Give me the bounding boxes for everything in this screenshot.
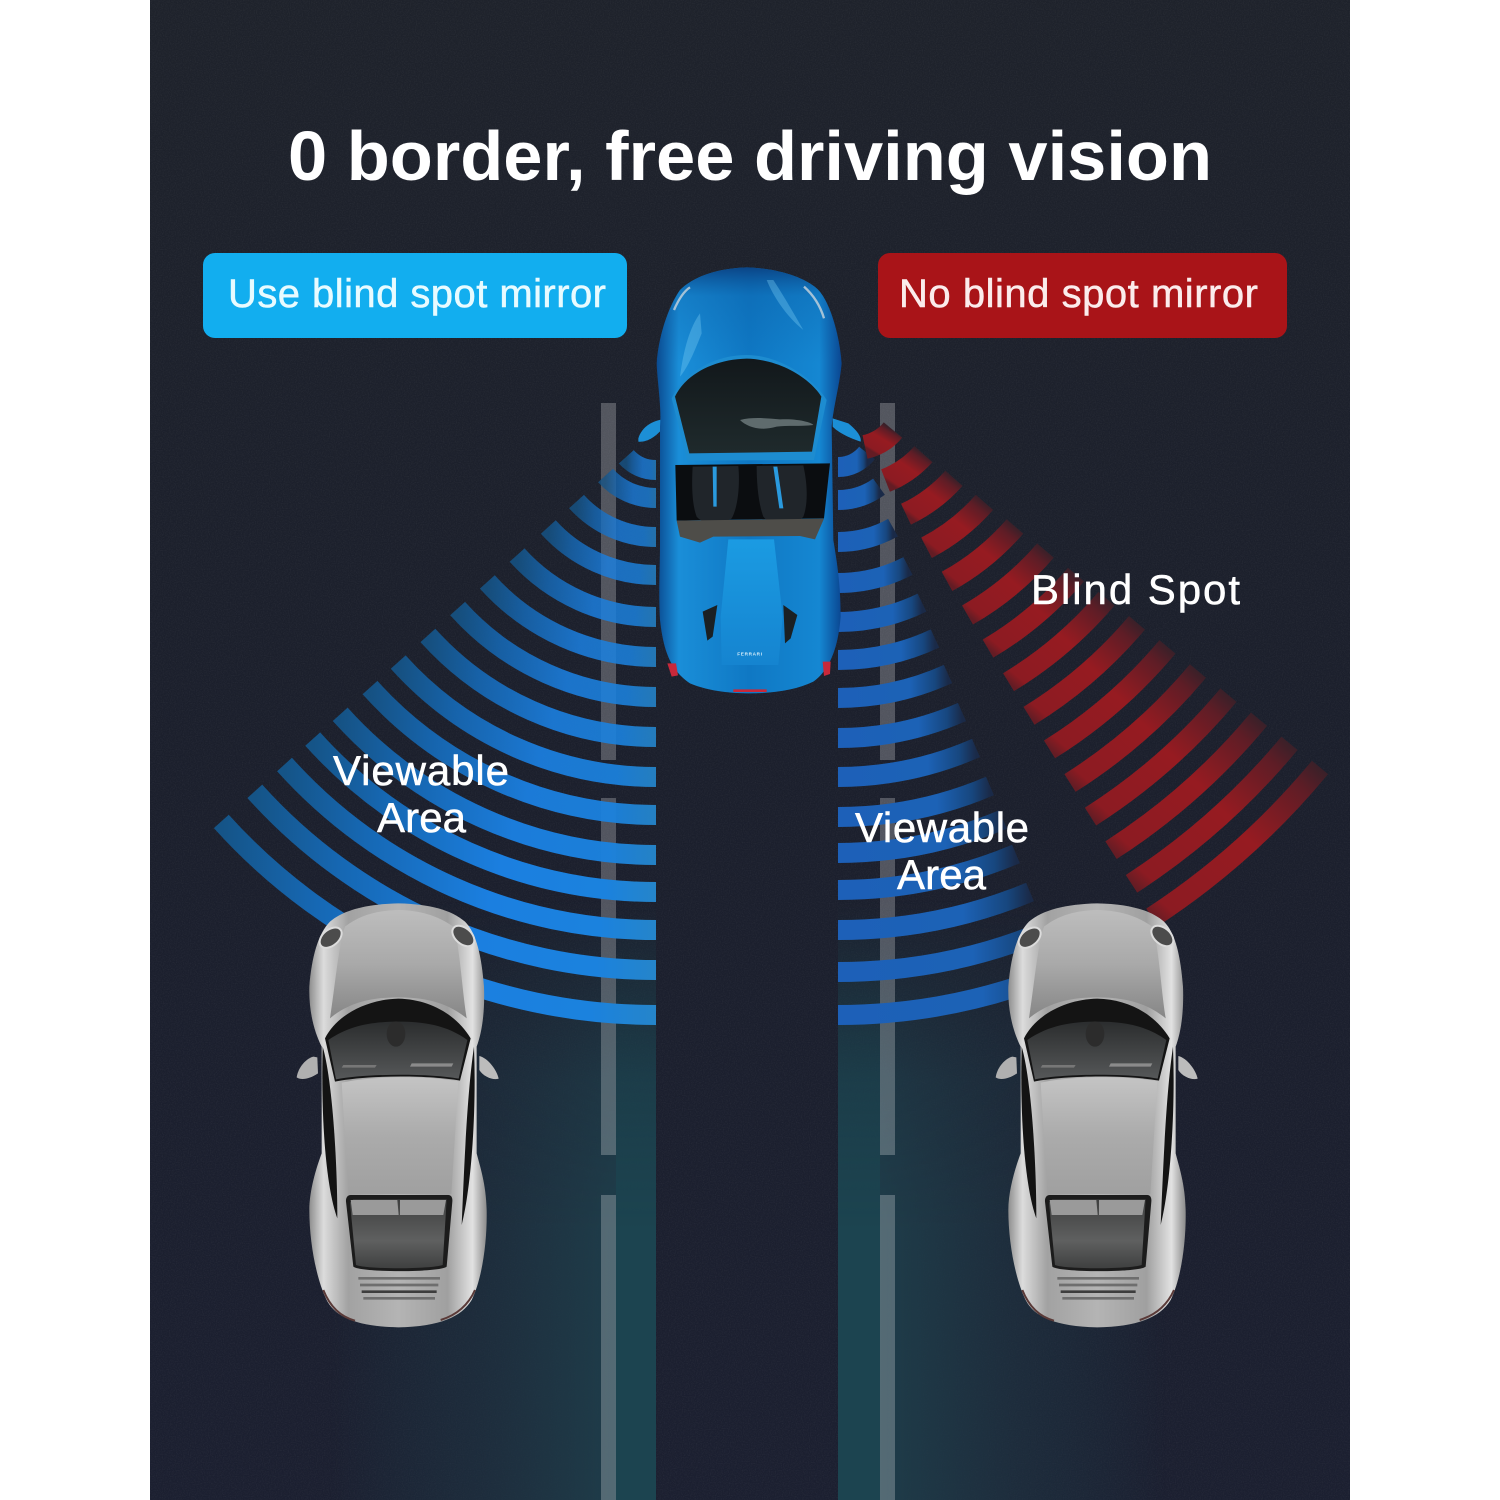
blue car trim bar (677, 519, 824, 543)
right silver car (996, 903, 1198, 1327)
badge: no blind spot mirror: No blind spot mirror (899, 272, 1258, 316)
label: viewable area left (333, 747, 509, 841)
blue convertible car (638, 267, 861, 693)
silver car right mirror (479, 1056, 499, 1079)
silver car windshield (325, 999, 471, 1082)
blue car tail lights (667, 662, 831, 692)
silver car roof (342, 1077, 458, 1194)
title: 0 border, free driving vision (288, 117, 1212, 195)
blue car badge: FERRARI (737, 652, 763, 657)
silver car rear vents (358, 1278, 440, 1298)
background panel (150, 0, 1350, 1500)
label: viewable area right: Viewable (855, 804, 1029, 851)
label: blind spot: Blind Spot (1031, 566, 1240, 613)
silver car tail trim (323, 1290, 475, 1321)
blue car cockpit (675, 463, 830, 521)
label: viewable area left: Area (377, 794, 467, 841)
label: viewable area right: Area (897, 851, 987, 898)
badge: use blind spot mirror: Use blind spot mirror (228, 272, 606, 316)
silver car rear window (346, 1195, 452, 1271)
blue car vents (703, 605, 797, 643)
blue car hood highlights (680, 280, 803, 377)
icon: blue car left mirror (638, 419, 664, 442)
blue car seats (692, 465, 807, 525)
right viewable area arcs (838, 453, 1060, 1015)
blue car headlights (674, 287, 824, 318)
silver car headlights (316, 922, 478, 952)
road glow (418, 954, 1077, 1500)
road lane lines (601, 403, 895, 1500)
silver car side windows (322, 1047, 475, 1225)
blue car windshield frame and glass (672, 355, 827, 461)
badge: use blind spot mirror (203, 253, 627, 338)
blue car body (657, 267, 842, 693)
left viewable area arcs (221, 457, 656, 1015)
silver car body (309, 903, 487, 1327)
silver car hood (330, 910, 467, 1018)
blue car rear deck (721, 539, 783, 665)
silver car left mirror (297, 1057, 318, 1079)
label: viewable area left: Viewable (333, 747, 509, 794)
left silver car (297, 903, 499, 1327)
icon: blue car right mirror (833, 418, 861, 442)
blind spot red arcs (865, 430, 1320, 917)
badge: no blind spot mirror (878, 253, 1287, 338)
label: viewable area right (855, 804, 1029, 898)
